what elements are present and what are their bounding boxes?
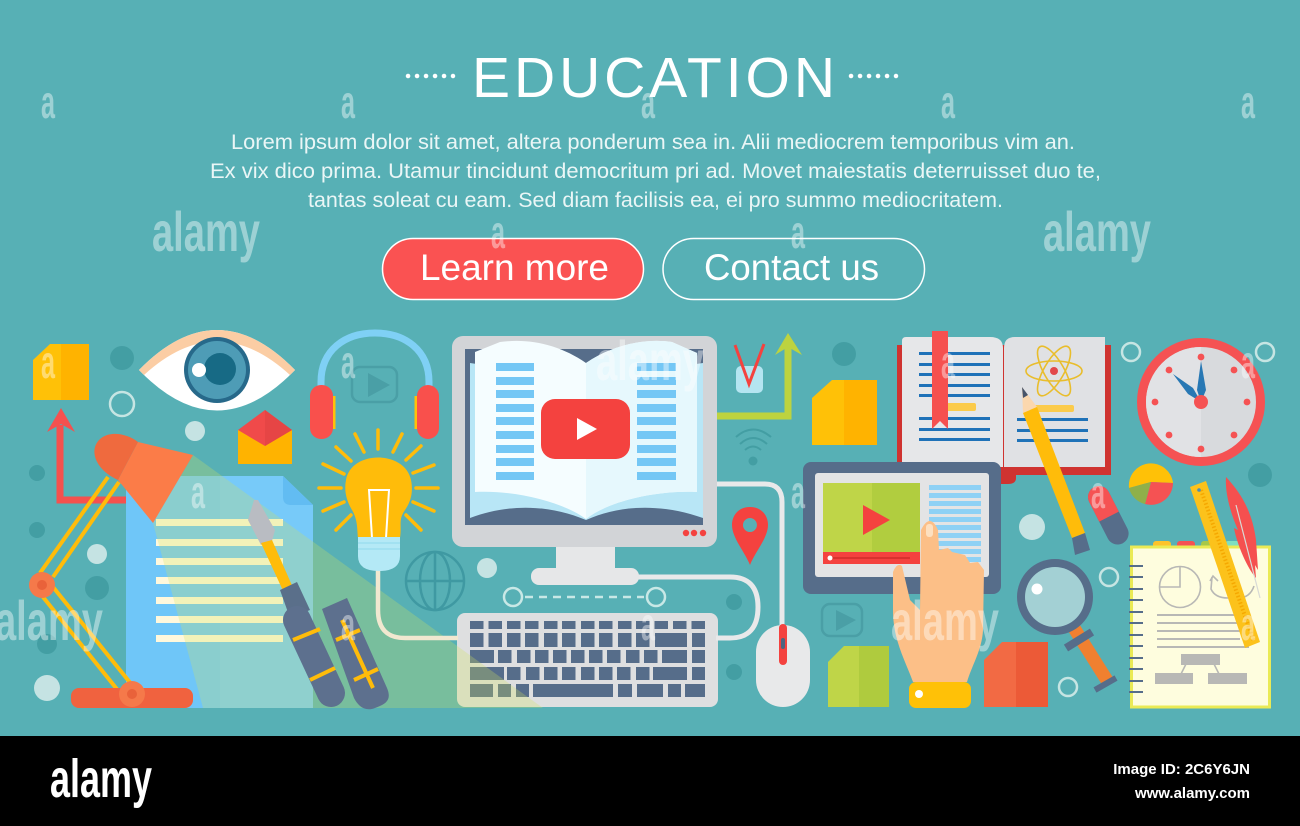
button: learn more (382, 238, 644, 300)
arrow: green up arrow (717, 333, 802, 416)
intro text block: Lorem ipsum dolor sit amet, altera ponderum sea in. Alii mediocrem temporibus vim an. (231, 131, 1075, 154)
icon: envelope (238, 410, 292, 464)
watermark overlay: a (1091, 466, 1105, 518)
icon: spiral notebook (1129, 541, 1270, 707)
footer image details: Image ID: 2C6Y6JN (1113, 761, 1250, 778)
watermark overlay: alamy (1043, 200, 1151, 263)
icon: green sticky note (828, 646, 889, 707)
watermark overlay: a (941, 76, 955, 128)
icon: keyboard (457, 613, 718, 707)
watermark overlay: a (191, 466, 205, 518)
icon: globe (406, 552, 464, 610)
watermark overlay: a (341, 76, 355, 128)
watermark overlay: a (1241, 76, 1255, 128)
icon: wall clock (1137, 338, 1265, 466)
watermark overlay: a (1241, 598, 1255, 650)
watermark overlay: a (41, 336, 55, 388)
icon: wifi (736, 430, 771, 466)
watermark overlay: a (791, 466, 805, 518)
dashed connector (504, 588, 665, 606)
watermark overlay: a (491, 206, 505, 258)
icon: eye (139, 330, 295, 410)
button: learn more: Learn more (420, 247, 609, 288)
icon: yellow pencil (1022, 387, 1090, 555)
icon: pointing hand (893, 521, 984, 708)
icon: faint play button lower (822, 604, 862, 636)
watermark overlay: a (641, 598, 655, 650)
icon: desk lamp (29, 434, 193, 708)
icon: red sticky note (984, 642, 1048, 707)
watermark overlay: alamy (891, 589, 999, 652)
watermark overlay (0, 76, 1255, 652)
icon: light bulb (319, 430, 458, 638)
icon: mouse (756, 624, 810, 707)
icon: headphones (310, 333, 439, 439)
footer image details: www.alamy.com (1134, 785, 1250, 802)
icon: pen cap (322, 598, 389, 709)
intro text block: tantas soleat cu eam. Sed diam facilisis ea, ei pro summo mediocritatem. (308, 189, 1003, 212)
icon: red feather quill (1226, 477, 1260, 598)
cables (636, 484, 782, 638)
icon: faint play button (352, 367, 397, 402)
watermark overlay: alamy (596, 329, 704, 392)
icon: capsule eraser (1084, 482, 1132, 548)
arrow: red up arrow (47, 408, 126, 500)
background dots and rings (29, 342, 1274, 701)
watermark overlay: a (641, 76, 655, 128)
lamp light beam (153, 455, 543, 708)
icon: yellow sticky note left (33, 344, 89, 400)
document with text lines (126, 476, 313, 708)
watermark overlay: a (1241, 336, 1255, 388)
watermark overlay: a (941, 336, 955, 388)
intro text block: Ex vix dico prima. Utamur tincidunt democritum pri ad. Movet maiestatis deterruisset duo te, (210, 160, 1101, 183)
icon: checkbox (735, 344, 764, 393)
icon: pie chart (1129, 463, 1173, 505)
icon: map pin (732, 507, 768, 565)
watermark overlay: alamy (152, 200, 260, 263)
icon: tablet with video (803, 462, 1001, 594)
watermark overlay: a (341, 598, 355, 650)
button: contact us: Contact us (704, 247, 879, 288)
watermark overlay: a (791, 206, 805, 258)
icon: open textbook (897, 331, 1111, 484)
icon: magnifying glass (1017, 559, 1116, 690)
watermark overlay: a (341, 336, 355, 388)
icon: desktop monitor with open book and play button (452, 336, 717, 547)
icon: fountain pen (248, 500, 335, 693)
watermark overlay: a (41, 76, 55, 128)
monitor stand (531, 547, 639, 585)
title: EDUCATION (472, 46, 835, 110)
footer logo: alamy (50, 749, 152, 809)
icon: yellow sticky note center (812, 380, 877, 445)
icon: ruler (1190, 481, 1260, 648)
button: contact us (663, 238, 924, 300)
intro text block (210, 131, 1101, 212)
footer image details (1113, 761, 1250, 802)
